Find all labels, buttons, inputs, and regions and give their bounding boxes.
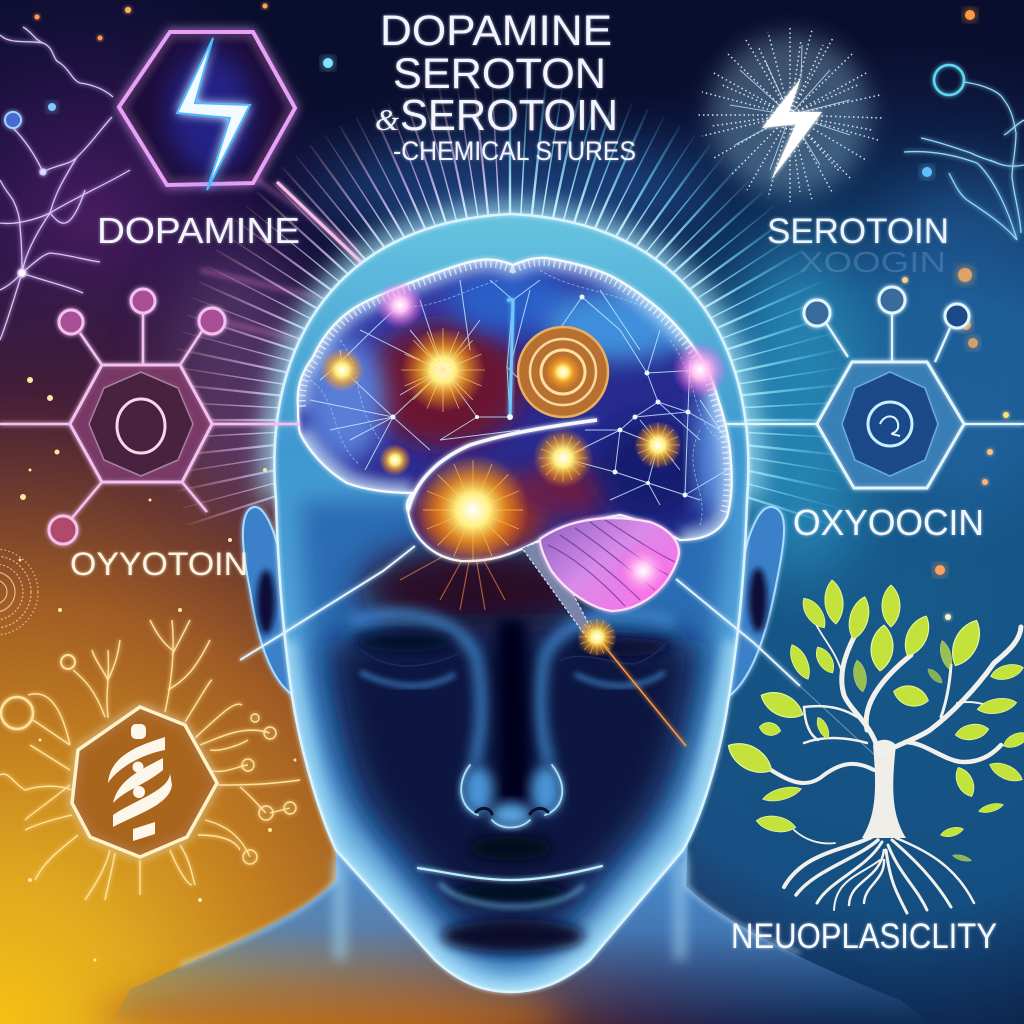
icon: molecule right — [724, 287, 1024, 488]
icon: left edge spiral — [0, 549, 38, 635]
label: neuroplasticity: NEUOPLASICLITY — [731, 917, 997, 956]
icon: serotonin burst with lightning bolt — [698, 28, 884, 204]
title: SEROTOIN — [400, 91, 618, 140]
neck and shoulders — [110, 840, 930, 1024]
title — [375, 7, 636, 166]
icon: molecule left — [0, 289, 300, 544]
neural network: upper right — [904, 65, 1024, 240]
title: & — [375, 102, 399, 137]
light rays right — [510, 80, 850, 525]
label: serotonin — [767, 212, 949, 279]
neural network: upper left — [0, 27, 130, 340]
right ear — [729, 507, 784, 696]
brain lights — [320, 281, 728, 657]
title: SEROTON — [393, 50, 606, 98]
face features — [354, 639, 669, 906]
light rays left — [170, 80, 510, 525]
label: oxytocin right: OXYOOCIN — [793, 502, 984, 543]
left ear — [243, 507, 294, 696]
icon: dna octagon — [72, 707, 217, 857]
brain — [290, 250, 740, 642]
light beams — [240, 540, 880, 760]
head halo — [274, 214, 748, 500]
title: DOPAMINE — [380, 7, 612, 55]
label: dopamine: DOPAMINE — [97, 210, 300, 251]
icon: dopamine hexagon with lightning bolt — [119, 32, 385, 285]
title: -CHEMICAL STURES — [393, 136, 636, 166]
branching network lower left — [0, 620, 300, 900]
label: serotonin: SEROTOIN — [767, 212, 949, 251]
label: oxytocin left: OYYOTOIN — [70, 546, 248, 582]
head and face shading — [274, 214, 748, 992]
icon: tree with leaves — [723, 579, 1024, 913]
label: serotonin: XOOGIN — [799, 247, 946, 279]
